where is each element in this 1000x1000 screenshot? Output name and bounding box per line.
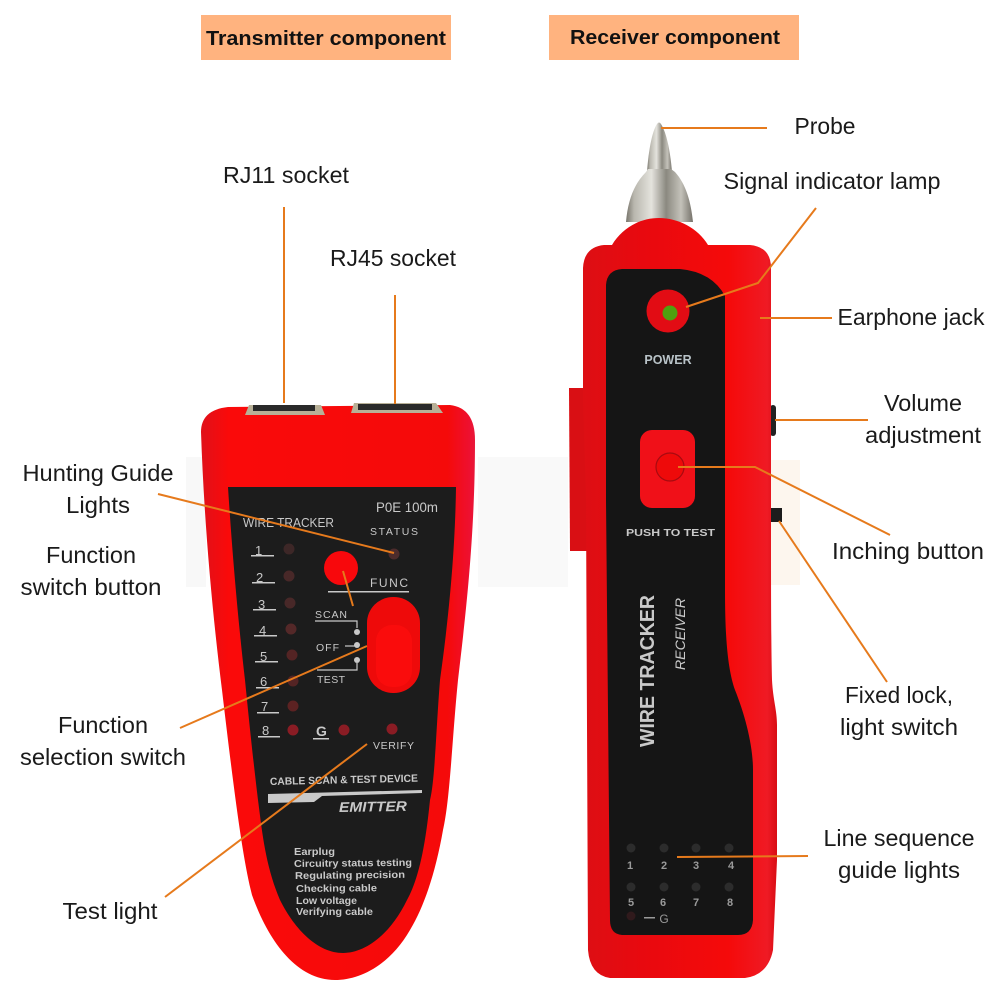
icon: RJ45 socket bbox=[351, 403, 443, 413]
text: status: STATUS bbox=[370, 526, 418, 538]
label: probe: Probe bbox=[794, 113, 856, 139]
line number LEDs: 2 bbox=[256, 570, 263, 585]
label: volume adjustment: Volume bbox=[884, 390, 962, 416]
text: feature list: Circuitry status testing bbox=[294, 858, 412, 870]
line number LEDs: 6 bbox=[260, 674, 267, 689]
text: feature list: Verifying cable bbox=[296, 907, 373, 918]
label: fixed lock light switch: light switch bbox=[840, 714, 958, 740]
arrow: function switch button bbox=[343, 571, 353, 606]
label: test light: Test light bbox=[62, 898, 158, 924]
label: line sequence guide lights: guide lights bbox=[838, 857, 960, 883]
transmitter black panel bbox=[228, 487, 456, 953]
label: function selection switch: selection switch bbox=[20, 744, 186, 770]
heading: receiver component: Receiver component bbox=[570, 26, 780, 49]
line number LEDs: 8 bbox=[262, 723, 269, 738]
receiver red body bbox=[583, 218, 777, 978]
arrow: function selection switch bbox=[180, 646, 367, 728]
text: func: FUNC bbox=[370, 576, 408, 590]
label: line sequence guide lights: Line sequence bbox=[824, 825, 974, 851]
label: function switch button: switch button bbox=[20, 574, 162, 600]
heading: receiver component bbox=[549, 15, 799, 60]
light switch bbox=[770, 508, 782, 522]
line sequence LEDs: 7 bbox=[693, 897, 699, 909]
line number LEDs: 3 bbox=[258, 597, 265, 612]
switch positions: TEST bbox=[317, 674, 346, 686]
line sequence LEDs: 1 bbox=[627, 860, 633, 872]
indicator: status lamp bbox=[388, 548, 400, 560]
text: emitter: EMITTER bbox=[339, 798, 408, 815]
text: cable scan and test device: CABLE SCAN & TEST DEVICE bbox=[270, 773, 418, 788]
heading: transmitter component bbox=[201, 15, 451, 60]
line number LEDs: 5 bbox=[260, 649, 267, 664]
label: RJ45 socket: RJ45 socket bbox=[330, 245, 457, 271]
line number LEDs bbox=[251, 543, 350, 740]
label: hunting guide lights bbox=[22, 460, 174, 518]
arrow: probe bbox=[661, 127, 767, 129]
label: line sequence guide lights bbox=[824, 825, 974, 883]
indicator: signal lamp bbox=[646, 290, 690, 332]
label: inching button: Inching button bbox=[832, 538, 984, 564]
arrow: fixed lock light switch bbox=[779, 521, 887, 682]
probe tip bbox=[626, 122, 693, 222]
side clip bbox=[569, 388, 588, 551]
arrow: hunting guide lights bbox=[158, 494, 394, 553]
arrow: volume adjustment bbox=[775, 419, 868, 421]
volume knob bbox=[770, 405, 776, 436]
line sequence LEDs: 8 bbox=[727, 897, 733, 909]
label: function selection switch bbox=[20, 712, 186, 770]
line sequence LEDs: 2 bbox=[661, 860, 667, 872]
switch positions: SCAN bbox=[315, 609, 347, 621]
arrow: test light bbox=[165, 744, 367, 897]
line sequence LEDs: 4 bbox=[728, 860, 735, 872]
label: hunting guide lights: Hunting Guide bbox=[22, 460, 174, 486]
icon: RJ11 socket bbox=[245, 405, 325, 415]
receiver black panel bbox=[606, 269, 753, 935]
arrow: RJ45 socket bbox=[394, 295, 396, 404]
switch: function selection bbox=[367, 597, 420, 693]
line number LEDs: 1 bbox=[255, 543, 262, 558]
label: volume adjustment bbox=[865, 390, 982, 448]
text: feature list: Checking cable bbox=[296, 883, 378, 895]
arrow: earphone jack bbox=[760, 317, 832, 319]
line sequence LEDs: G bbox=[659, 912, 669, 926]
label: hunting guide lights: Lights bbox=[66, 492, 130, 518]
label: volume adjustment: adjustment bbox=[865, 422, 982, 448]
arrow: RJ11 socket bbox=[283, 207, 285, 403]
device: transmitter bbox=[201, 403, 475, 980]
arrow: inching button bbox=[678, 467, 890, 535]
arrow: signal indicator lamp bbox=[686, 208, 816, 307]
label: fixed lock light switch: Fixed lock, bbox=[845, 682, 953, 708]
text: feature list: Low voltage bbox=[296, 896, 357, 907]
label: fixed lock light switch bbox=[840, 682, 958, 740]
line number LEDs: G bbox=[316, 723, 327, 739]
text: wire tracker vertical: WIRE TRACKER bbox=[637, 594, 659, 747]
label: RJ11 socket: RJ11 socket bbox=[223, 162, 350, 188]
text: feature list: Regulating precision bbox=[295, 870, 405, 882]
heading: transmitter component: Transmitter component bbox=[206, 27, 446, 50]
text: wire tracker: WIRE TRACKER bbox=[243, 516, 334, 530]
text: feature list: Earplug bbox=[294, 847, 335, 858]
line number LEDs: 7 bbox=[261, 699, 268, 714]
transmitter red body bbox=[201, 405, 475, 980]
line sequence LEDs: 5 bbox=[628, 897, 634, 909]
switch positions bbox=[315, 609, 360, 686]
line sequence LEDs: 6 bbox=[660, 897, 666, 909]
indicator: verify: VERIFY bbox=[373, 740, 414, 752]
device: receiver bbox=[569, 122, 782, 978]
text: push to test: PUSH TO TEST bbox=[626, 527, 716, 539]
text: receiver vertical: RECEIVER bbox=[672, 598, 688, 670]
button: function switch bbox=[324, 551, 358, 585]
label: function switch button: Function bbox=[46, 542, 136, 568]
line sequence LEDs: 3 bbox=[693, 860, 699, 872]
label: signal indicator lamp: Signal indicator lamp bbox=[724, 168, 940, 194]
text: feature list bbox=[294, 847, 412, 918]
text: POE 100m: P0E 100m bbox=[376, 499, 438, 515]
indicator: verify bbox=[373, 724, 414, 752]
button: inching bbox=[640, 430, 695, 508]
label: function selection switch: Function bbox=[58, 712, 148, 738]
line sequence LEDs bbox=[626, 844, 735, 926]
switch positions: OFF bbox=[316, 642, 339, 654]
arrow: line sequence guide lights bbox=[677, 856, 808, 857]
label: function switch button bbox=[20, 542, 162, 600]
label: earphone jack: Earphone jack bbox=[838, 304, 985, 330]
line number LEDs: 4 bbox=[259, 623, 266, 638]
text: power: POWER bbox=[644, 353, 692, 367]
